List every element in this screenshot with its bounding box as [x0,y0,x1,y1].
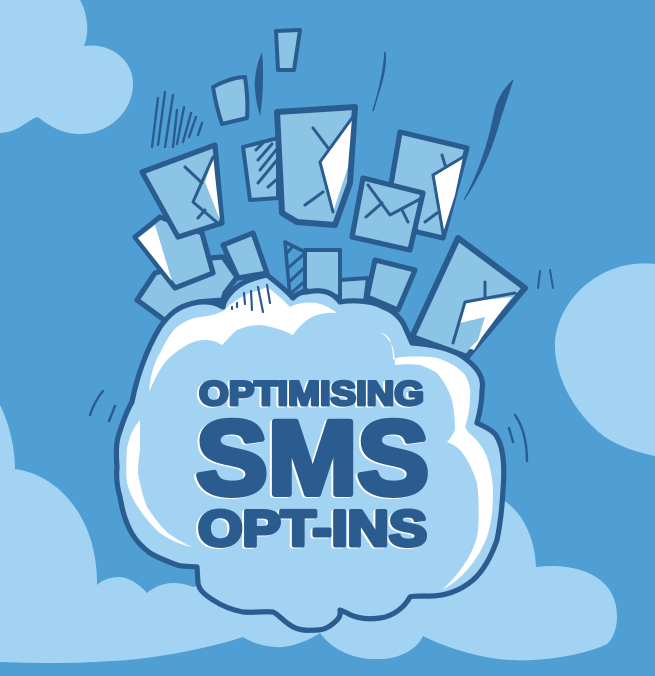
highlight: left [126,420,192,547]
envelopes above the cloud [90,30,553,461]
title [196,375,429,556]
cloud: right [555,263,655,456]
envelope: small left [223,233,267,278]
envelope: hatched small [243,138,278,200]
cloud: top left [0,0,133,134]
main cloud [116,275,504,630]
cloud body [116,275,504,630]
tick marks on cloud [232,285,270,312]
envelope: upper left small [213,77,247,124]
highlight: right [380,332,493,590]
envelope: right back [390,132,467,238]
title line 3: OPT-INS [198,500,427,556]
envelope: big left [142,145,222,237]
envelope: hatched centre [285,242,305,297]
envelope: left lower [135,217,213,288]
cloud: bottom [0,405,617,663]
envelope: top small [276,30,300,70]
envelope: big right [412,238,525,357]
envelope: small front [352,178,423,250]
motion lines [90,52,553,461]
title line 1: OPTIMISING [199,375,424,413]
highlight: top [149,287,337,392]
envelope: back left [137,257,237,322]
title line 2: SMS [196,400,429,517]
envelope: centre rectangles [305,250,415,310]
envelope: big centre [277,107,355,225]
